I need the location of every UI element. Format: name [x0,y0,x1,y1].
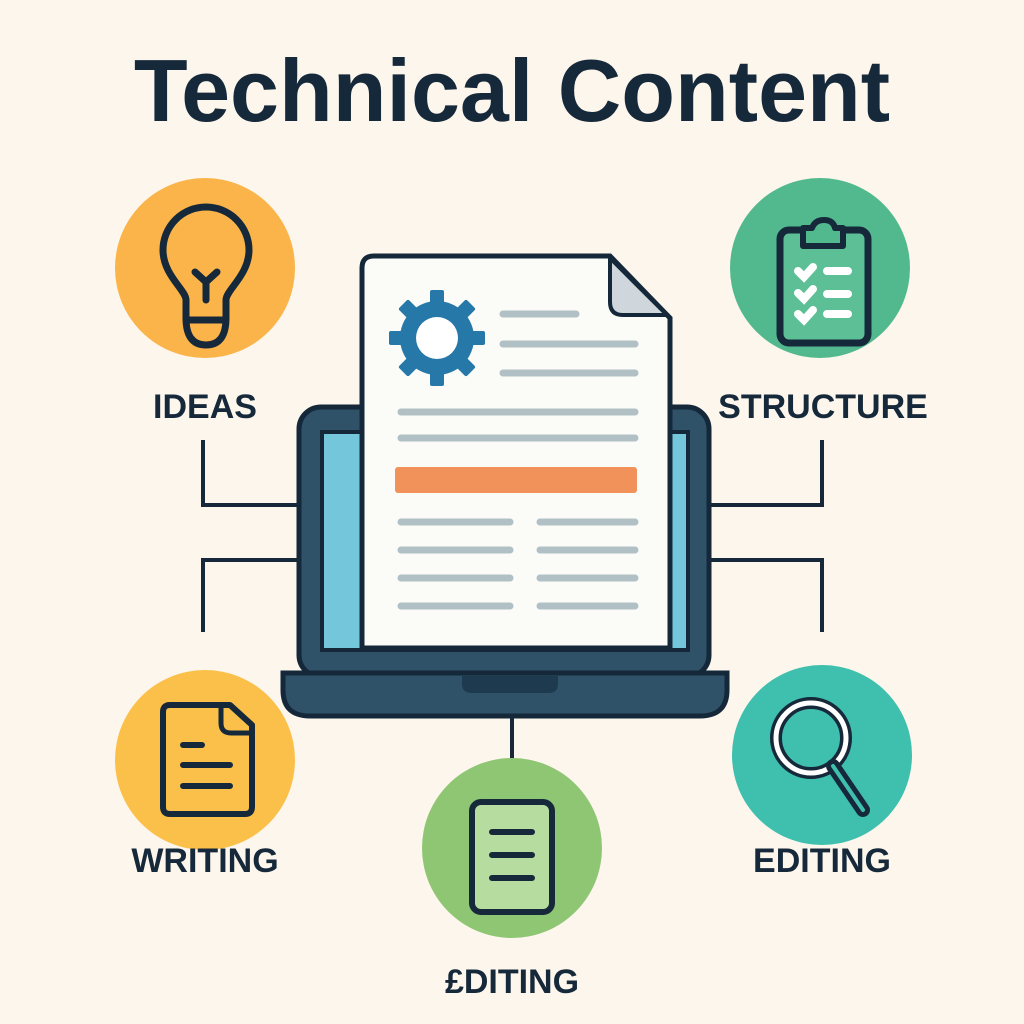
connectors [203,440,822,770]
label: editing right: EDITING [753,842,891,880]
highlight bar [395,467,637,493]
icon: writing document [115,670,295,850]
icon: ideas lightbulb [115,178,295,358]
label: structure: STRUCTURE [718,388,928,426]
label: editing center: £DITING [445,963,579,1001]
icon: gear [389,290,485,386]
laptop [283,407,727,716]
label: writing: WRITING [131,842,279,880]
document [362,256,670,648]
title: Technical Content [134,41,890,140]
icon: structure clipboard [730,178,910,358]
icon: editing magnifier [732,665,912,845]
icon: editing center document [422,758,602,938]
label: ideas: IDEAS [153,388,257,426]
